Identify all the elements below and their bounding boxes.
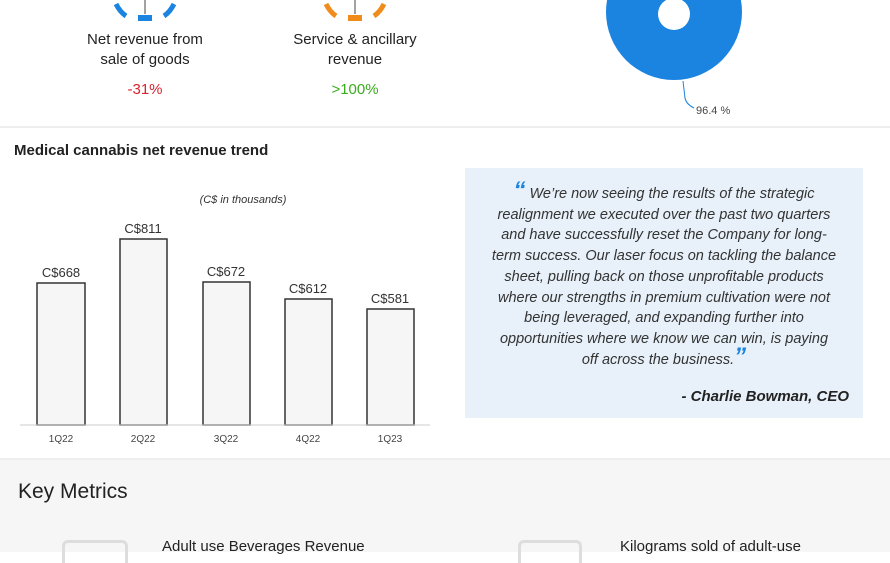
text: net revenue label: sale of goods bbox=[100, 51, 190, 68]
text: service label bbox=[293, 31, 417, 68]
icon: orange gauge bbox=[324, 0, 386, 21]
chart: bar chart: C$581 bbox=[371, 291, 409, 306]
chart: bar chart: 3Q22 bbox=[214, 434, 239, 445]
chart: donut: 96.4 % bbox=[696, 105, 730, 117]
callout: CEO quote: and have successfully reset the Company for long- bbox=[501, 227, 827, 243]
panel: key metrics bbox=[0, 458, 890, 552]
chart: bar chart: 2Q22 bbox=[131, 434, 156, 445]
callout: CEO quote: “ We’re now seeing the results of the strategic bbox=[513, 177, 815, 204]
callout: CEO quote: - Charlie Bowman, CEO bbox=[681, 388, 849, 405]
chart: bar chart bbox=[20, 194, 430, 445]
text: metric 1: Adult use Beverages Revenue bbox=[162, 538, 365, 555]
panel: revenue breakdown bbox=[0, 0, 890, 127]
callout: CEO quote bbox=[465, 168, 863, 418]
callout: CEO quote: opportunities where we know we can win, is paying bbox=[500, 331, 828, 347]
chart: donut bbox=[606, 0, 742, 117]
chart: bar chart: 4Q22 bbox=[296, 434, 321, 445]
callout: CEO quote: being leveraged, and expanding further into bbox=[524, 310, 804, 326]
icon: metric 1 bbox=[62, 540, 128, 563]
callout: CEO quote: off across the business.” bbox=[582, 343, 746, 370]
chart: bar chart: C$672 bbox=[207, 264, 245, 279]
heading: key metrics: Key Metrics bbox=[18, 480, 128, 503]
chart: bar chart: 1Q23 bbox=[378, 434, 403, 445]
icon: blue gauge bbox=[114, 0, 176, 21]
callout: CEO quote: sheet, pulling back on those unprofitable products bbox=[504, 269, 824, 285]
text: service label: revenue bbox=[328, 51, 382, 68]
text: net revenue label bbox=[87, 31, 203, 68]
text: service label: Service & ancillary bbox=[293, 31, 417, 48]
callout: CEO quote: term success. Our laser focus on tackling the balance bbox=[492, 248, 836, 264]
value: -31%: -31% bbox=[127, 81, 163, 98]
value: >100%: >100% bbox=[331, 81, 379, 98]
chart: bar chart: C$811 bbox=[124, 221, 162, 236]
chart: bar chart: C$668 bbox=[42, 265, 80, 280]
chart: bar chart: (C$ in thousands) bbox=[200, 194, 287, 206]
text: metric 2: Kilograms sold of adult-use bbox=[620, 538, 801, 555]
text: net revenue label: Net revenue from bbox=[87, 31, 203, 48]
callout: CEO quote: realignment we executed over the past two quarters bbox=[498, 207, 830, 223]
heading: trend: Medical cannabis net revenue trend bbox=[14, 142, 268, 159]
chart: bar chart: C$612 bbox=[289, 281, 327, 296]
callout: CEO quote: where our strengths in premium cultivation were not bbox=[498, 290, 830, 306]
chart: bar chart: 1Q22 bbox=[49, 434, 74, 445]
icon: metric 2 bbox=[518, 540, 582, 563]
